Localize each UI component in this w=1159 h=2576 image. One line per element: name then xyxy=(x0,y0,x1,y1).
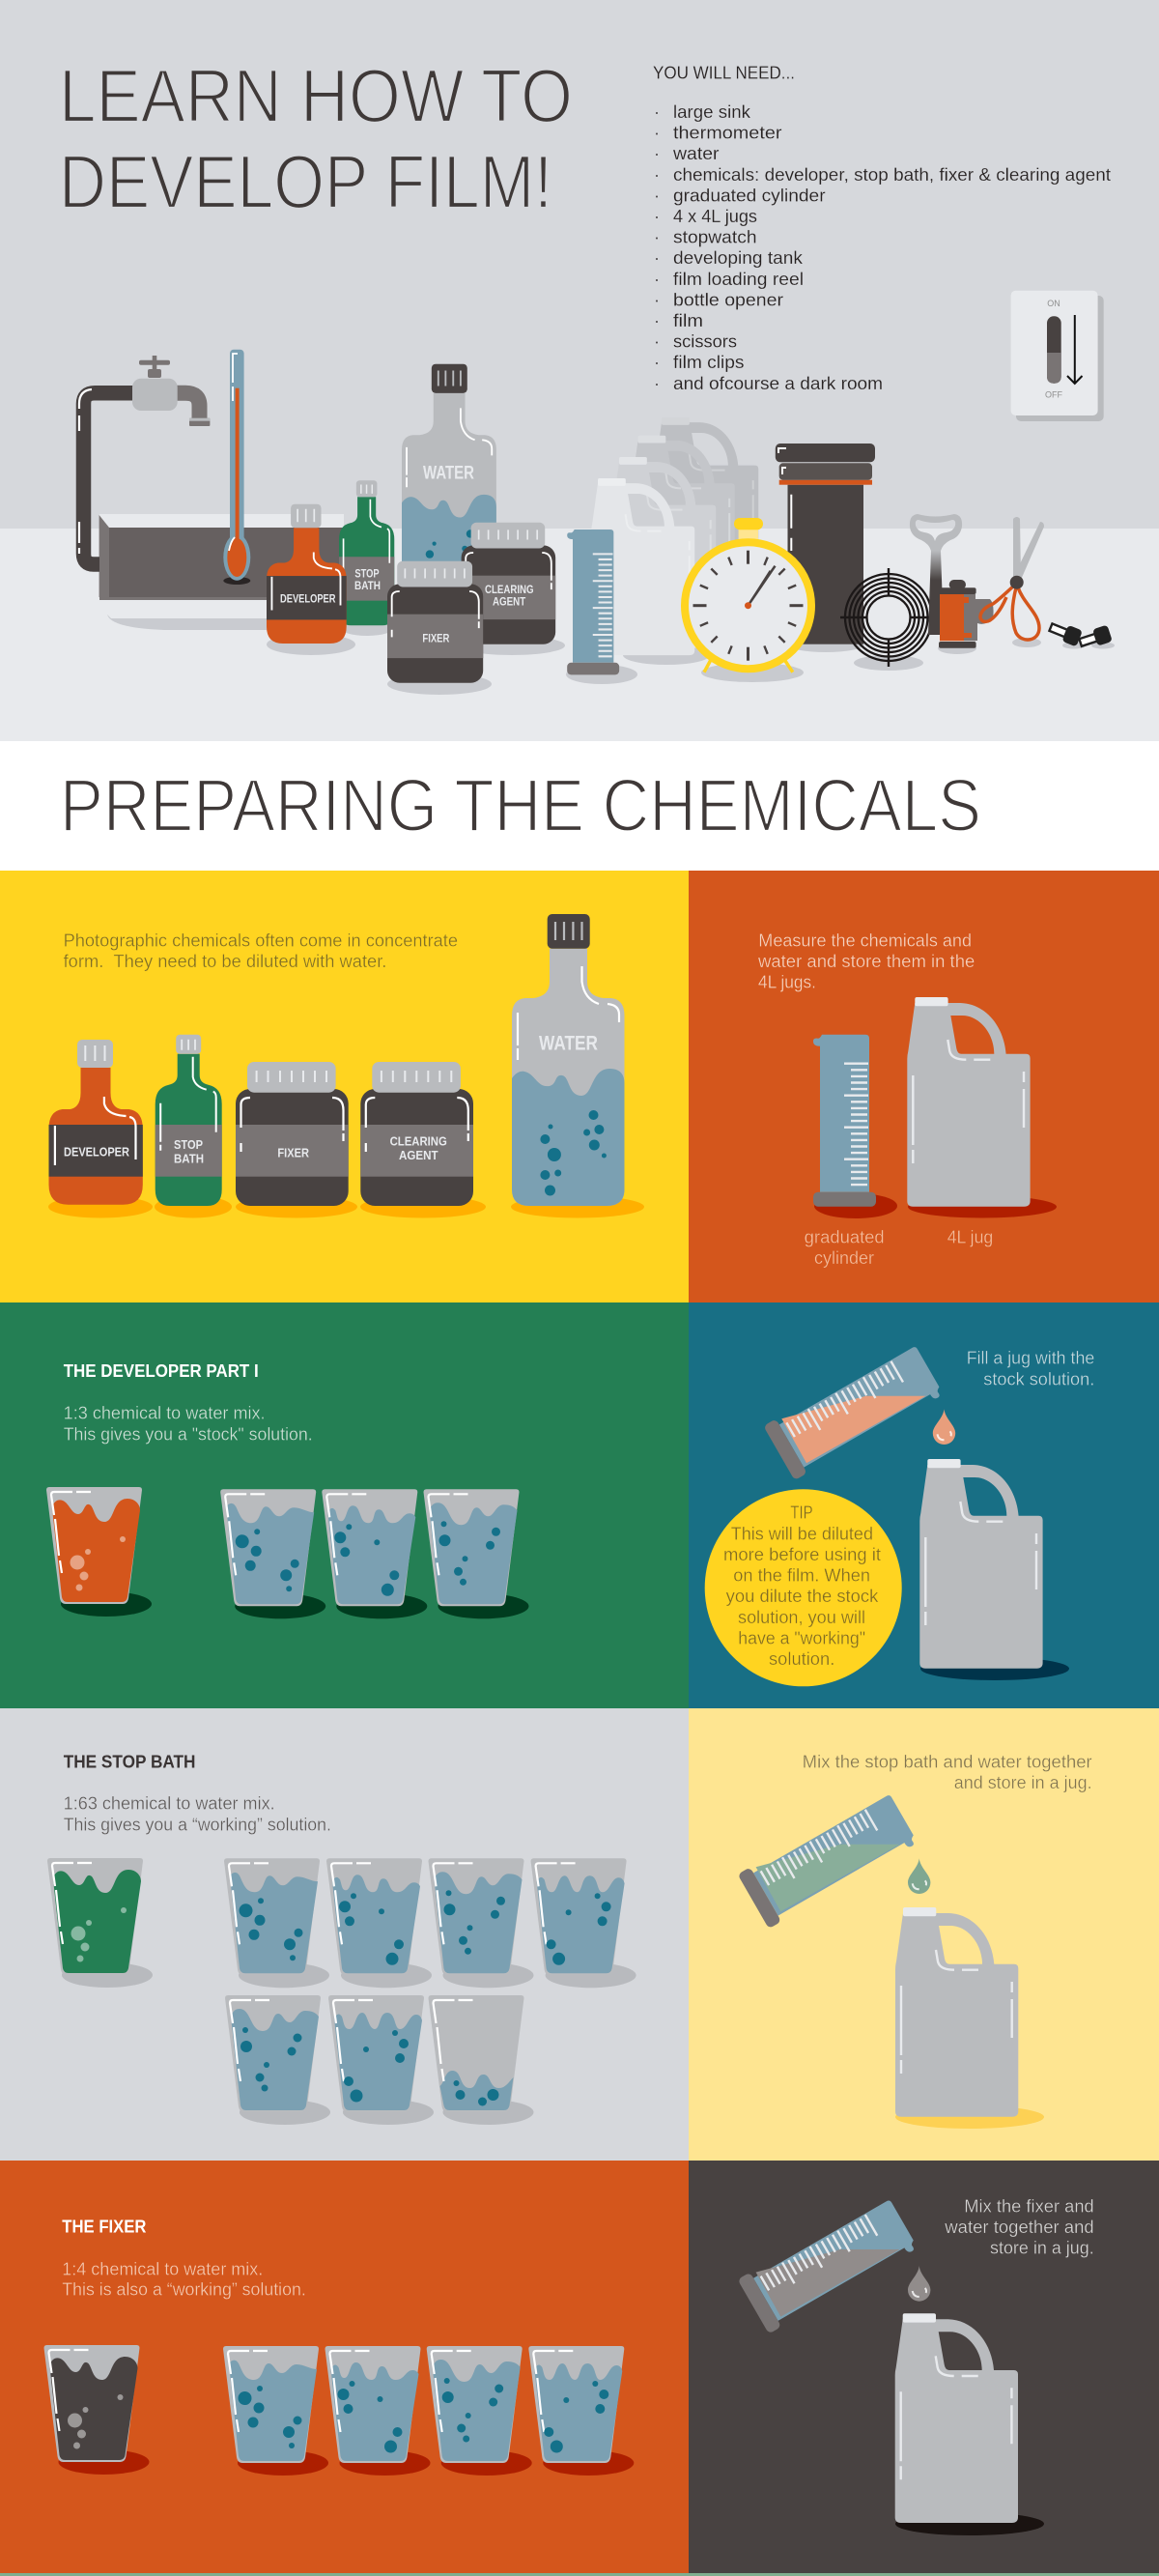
caption: graduated cylinder xyxy=(805,1228,885,1268)
icon: clearing agent jar: AGENT xyxy=(493,595,526,609)
icon: drop xyxy=(908,2266,930,2302)
icon: developer bottle xyxy=(267,504,355,655)
callout: tip: have a "working" xyxy=(738,1629,865,1648)
text block: measure instructions: water and store them in the xyxy=(757,952,975,971)
icon: clearing agent jar: AGENT xyxy=(399,1148,438,1162)
text block: mix stop bath: and store in a jug. xyxy=(954,1773,1092,1792)
text block: you will need list: · xyxy=(654,186,660,205)
icon: glass of developer xyxy=(46,1487,152,1617)
icon: clearing agent jar xyxy=(459,523,565,655)
text block: you will need list: stopwatch xyxy=(673,228,757,247)
panel: measure chemicals (orange) xyxy=(689,871,1159,1302)
text block: measure instructions: 4L jugs. xyxy=(758,973,816,992)
text block: mix stop bath: Mix the stop bath and water together xyxy=(803,1752,1092,1771)
text block: you will need list: YOU WILL NEED... xyxy=(653,64,795,83)
text block: you will need list: water xyxy=(672,144,720,163)
icon: tap and pipe xyxy=(79,356,210,564)
text block: fixer ratio: This is also a “working” solution. xyxy=(62,2280,306,2300)
text block: stop bath ratio: This gives you a “working” solution. xyxy=(64,1815,331,1834)
icon: pouring cylinder xyxy=(738,1794,918,1929)
text block: you will need list: film clips xyxy=(673,353,744,372)
panel: the developer part I (green) xyxy=(0,1302,689,1708)
icon: pouring cylinder xyxy=(738,2199,918,2333)
heading: preparing the chemicals: PREPARING THE CHEMICALS xyxy=(60,764,981,847)
text block: you will need list: · xyxy=(654,207,660,226)
text block: you will need list: film xyxy=(673,311,703,330)
callout: tip: solution. xyxy=(769,1649,834,1669)
heading: preparing the chemicals xyxy=(0,741,1159,871)
icon: developer bottle: DEVELOPER xyxy=(64,1145,130,1159)
text block: chemicals intro xyxy=(64,930,458,971)
text block: fixer ratio: 1:4 chemical to water mix. xyxy=(62,2259,263,2278)
callout: tip: more before using it xyxy=(723,1545,881,1564)
icon: light switch xyxy=(1011,291,1104,421)
icon: four faded 4L jugs xyxy=(591,417,758,665)
icon: 4L jug xyxy=(895,1907,1044,2129)
icon: drop xyxy=(933,1409,955,1445)
text block: chemicals intro: form. They need to be diluted with water. xyxy=(64,952,386,971)
icon: fixer jar: FIXER xyxy=(277,1146,310,1160)
icon: film loading reel xyxy=(840,568,936,671)
icon: water bottle: WATER xyxy=(423,464,474,484)
text block: fill a jug xyxy=(967,1349,1094,1388)
title: LEARN HOW TO xyxy=(59,53,573,138)
icon: stop bath bottle: BATH xyxy=(354,579,381,592)
text block: you will need list: graduated cylinder xyxy=(673,186,826,205)
icon: clearing agent jar: CLEARING xyxy=(485,583,534,596)
text block: mix fixer: store in a jug. xyxy=(990,2239,1094,2258)
text block: measure instructions: Measure the chemicals and xyxy=(758,930,972,950)
icon: fixer jar: FIXER xyxy=(422,631,450,644)
text block: stop bath ratio xyxy=(64,1794,331,1834)
heading: the fixer: THE FIXER xyxy=(62,2217,147,2237)
icon: drop xyxy=(908,1858,930,1894)
text block: you will need list: · xyxy=(654,102,660,122)
panel: the stop bath (grey) xyxy=(0,1708,689,2161)
text block: you will need list: film loading reel xyxy=(673,270,804,289)
callout: tip: you dilute the stock xyxy=(726,1587,879,1606)
text block: you will need list: · xyxy=(654,165,660,185)
heading: the developer part I: THE DEVELOPER PART I xyxy=(64,1360,259,1381)
icon: sink xyxy=(99,514,344,630)
icons: four glasses of water xyxy=(223,2346,634,2476)
icon: stop bath bottle: STOP xyxy=(174,1137,203,1152)
text block: mix fixer: water together and xyxy=(944,2218,1094,2237)
text block: you will need list: · xyxy=(654,374,660,393)
icon: 4L jug xyxy=(919,1459,1069,1680)
icon: stop bath bottle xyxy=(338,480,396,636)
icon: bottle opener xyxy=(910,514,962,635)
icon: fixer jar xyxy=(387,561,492,695)
icon: graduated cylinder xyxy=(813,1035,897,1218)
text block: chemicals intro: Photographic chemicals often come in concentrate xyxy=(64,930,458,950)
text block: developer ratio: This gives you a "stock" solution. xyxy=(64,1424,313,1444)
text block: you will need list: · xyxy=(654,311,660,330)
text block: you will need list: developing tank xyxy=(673,248,804,268)
icon: stop bath bottle xyxy=(155,1035,232,1217)
panel: header wall with supplies xyxy=(0,0,1159,741)
text block: you will need list: · xyxy=(654,290,660,309)
text block: you will need list xyxy=(653,64,1111,393)
icon: light switch: ON xyxy=(1047,299,1060,308)
icon: water bottle: WATER xyxy=(539,1033,598,1055)
text block: you will need list: · xyxy=(654,353,660,372)
icon: stop bath bottle: BATH xyxy=(174,1152,204,1166)
text block: you will need list: · xyxy=(654,332,660,352)
text block: you will need list: chemicals: developer, stop bath, fixer & clearing agent xyxy=(673,165,1111,185)
text block: mix fixer: Mix the fixer and xyxy=(964,2196,1094,2216)
icons: seven glasses of water xyxy=(224,1858,636,2125)
caption: graduated cylinder: cylinder xyxy=(814,1248,874,1268)
panel: fill a jug (teal) xyxy=(689,1302,1159,1708)
icon: pouring cylinder xyxy=(763,1346,944,1480)
text block: developer ratio xyxy=(64,1404,313,1444)
text block: fixer ratio xyxy=(62,2259,306,2300)
icon: film clips xyxy=(1048,619,1115,651)
text block: stop bath ratio: 1:63 chemical to water mix. xyxy=(64,1794,275,1814)
text block: mix fixer xyxy=(944,2196,1094,2258)
title xyxy=(59,53,573,224)
icon: film canister xyxy=(938,580,994,654)
icon: water bottle xyxy=(402,364,496,611)
panel: mix fixer (dark) xyxy=(689,2161,1159,2573)
icon: developer bottle xyxy=(48,1040,153,1217)
title: DEVELOP FILM! xyxy=(59,139,552,224)
caption: 4L jug: 4L jug xyxy=(947,1228,993,1247)
text block: you will need list: · xyxy=(654,228,660,247)
icon: water bottle xyxy=(511,914,644,1217)
text block: fill a jug: Fill a jug with the xyxy=(967,1349,1094,1368)
icons: three glasses of water xyxy=(220,1489,528,1618)
text block: you will need list: large sink xyxy=(673,102,751,122)
callout: tip: TIP xyxy=(790,1503,813,1523)
icon: clearing agent jar: CLEARING xyxy=(390,1134,447,1149)
icon: graduated cylinder xyxy=(566,530,637,684)
callout: tip: This will be diluted xyxy=(731,1524,873,1543)
icon: 4L jug xyxy=(907,997,1057,1217)
icon: thermometer xyxy=(223,350,250,585)
text block: you will need list: · xyxy=(654,144,660,163)
icon: light switch: OFF xyxy=(1045,390,1062,400)
panel: mix stop bath (pale yellow) xyxy=(689,1708,1159,2161)
text block: you will need list: 4 x 4L jugs xyxy=(673,207,757,226)
text block: you will need list: and ofcourse a dark room xyxy=(673,374,883,393)
icon: developer bottle: DEVELOPER xyxy=(280,591,336,605)
text block: you will need list: · xyxy=(654,124,660,143)
icon: glass of fixer xyxy=(44,2345,149,2475)
text block: fill a jug: stock solution. xyxy=(983,1369,1094,1388)
icon: fixer jar xyxy=(236,1062,357,1217)
panel: the fixer (orange) xyxy=(0,2161,689,2573)
text block: you will need list: · xyxy=(654,270,660,289)
callout: tip: solution, you will xyxy=(738,1608,865,1627)
text block: measure instructions xyxy=(757,930,975,992)
caption: graduated cylinder: graduated xyxy=(805,1228,885,1247)
text block: you will need list: bottle opener xyxy=(673,290,783,309)
heading: the stop bath: THE STOP BATH xyxy=(64,1751,195,1771)
text block: you will need list: · xyxy=(654,248,660,268)
icon: clearing agent jar xyxy=(360,1062,486,1217)
icon: scissors xyxy=(980,517,1044,647)
icon: developing tank xyxy=(776,444,875,652)
icon: stopwatch xyxy=(685,518,811,682)
callout: tip: on the film. When xyxy=(733,1566,870,1586)
icon: glass of stop bath xyxy=(47,1858,153,1988)
text block: you will need list: thermometer xyxy=(673,124,782,143)
icon: stop bath bottle: STOP xyxy=(354,566,380,580)
text block: developer ratio: 1:3 chemical to water mix. xyxy=(64,1404,266,1423)
icon: 4L jug xyxy=(895,2313,1044,2535)
callout: tip xyxy=(705,1489,902,1686)
text block: you will need list: scissors xyxy=(673,332,737,352)
text block: mix stop bath xyxy=(803,1752,1092,1792)
panel: photographic chemicals (yellow) xyxy=(0,871,689,1302)
